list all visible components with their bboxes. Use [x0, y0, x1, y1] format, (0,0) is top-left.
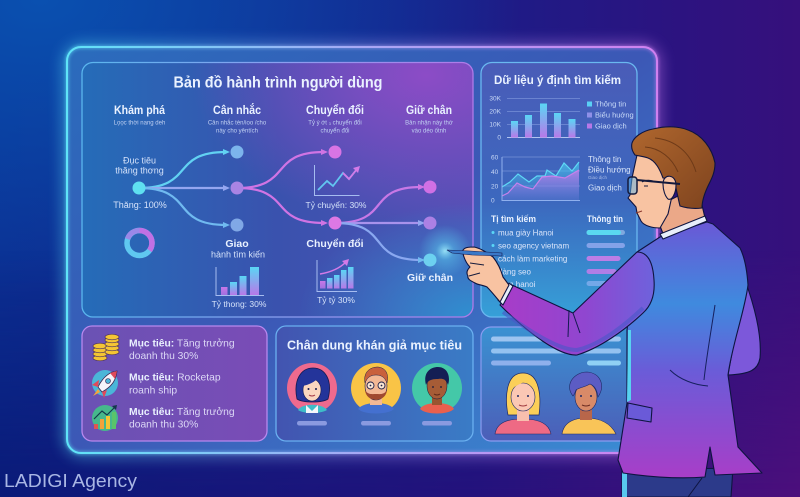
figure: man pointing at board: [447, 127, 762, 497]
heading: Giao: [211, 238, 265, 260]
heading: journey title: Bản đồ hành trình người dùng: [174, 74, 382, 92]
flow arrows: [139, 152, 421, 260]
heading: Giữ chân lower: Giữ chân: [407, 272, 453, 284]
icon: growth chart: [92, 405, 118, 431]
area chart: 40: [491, 169, 499, 176]
label: Tỷ thong: Tỷ thong: 30%: [212, 299, 267, 309]
area chart: [491, 154, 580, 204]
avatar: woman: [287, 363, 337, 413]
column: Giữ chân: Bản nhận này thớ: [405, 120, 453, 126]
goal text 2: roanh ship: [129, 386, 177, 396]
avatar: dark-haired man: [412, 363, 462, 414]
table: search terms: cách làm marketing: [498, 254, 567, 264]
panel: search intent data: [481, 62, 637, 317]
bar chart: intent volume: [489, 96, 580, 142]
area chart labels: Điều hướng: [588, 166, 631, 174]
table: search terms: Thông tin: [587, 214, 623, 224]
column: Khám phá: Khám phá: [114, 105, 166, 117]
line chart: [314, 165, 360, 196]
table: search terms: mua giày Hanoi: [498, 228, 554, 238]
column: Chuyển đổi: Chuyển đổi: [306, 105, 364, 117]
bar chart: Chuyển đổi: [317, 259, 357, 292]
neck: [660, 190, 705, 236]
bar chart: intent volume: 30K: [489, 96, 502, 102]
table: search terms: seo agency vietnam: [498, 242, 569, 250]
area chart: 60: [491, 154, 499, 162]
panel: goals: [82, 326, 267, 441]
glasses: [637, 180, 680, 184]
bar chart: Giao: [216, 267, 264, 296]
legend: Giao dịch: [595, 122, 627, 130]
watermark: LADIGI Agency: [4, 471, 137, 491]
heading: Giao: Giao: [225, 238, 249, 250]
column: Giữ chân: vào déo ốtnh: [412, 128, 446, 134]
heading: Giao: hành tìm kiến: [211, 250, 265, 260]
glow: pointer touch: [419, 225, 471, 277]
area chart: 0: [491, 198, 495, 204]
panel: personas: [481, 327, 651, 441]
column: Cân nhắc: Cân nhắc: [213, 104, 262, 117]
panel: target audience: [276, 326, 473, 441]
table: search terms: dàng seo: [498, 268, 531, 276]
column: Khám phá: Lọọc thời nang deh: [114, 120, 165, 126]
start label: [113, 156, 167, 210]
pointing arm: [500, 252, 654, 355]
head: [628, 127, 715, 236]
persona: young man: [562, 372, 616, 434]
bar chart: intent volume: 20K: [489, 108, 502, 116]
column: Chuyển đổi: [306, 105, 364, 134]
table: search terms: Tị tìm kiếm: [491, 214, 536, 224]
table: search terms: [491, 214, 625, 289]
column: Khám phá: [114, 105, 166, 126]
goal text 1: doanh thu 30%: [129, 351, 198, 362]
table: search terms: đám hanoi: [498, 280, 536, 289]
icon: coins: [93, 334, 119, 361]
start label: Thăng: 100%: [113, 200, 167, 210]
area chart labels: [588, 155, 631, 192]
area chart labels: Giao dịch: [588, 184, 622, 192]
column: Chuyển đổi: Tỷ ý ớt ₃ chuyển đổi: [308, 120, 362, 126]
area chart labels: Thông tin: [588, 155, 621, 164]
back arm: [728, 280, 760, 375]
panel: user journey map: [82, 62, 473, 317]
goal text 1: [129, 338, 235, 362]
bar chart: intent volume: 10K: [489, 122, 502, 128]
bar chart: intent volume: 0: [497, 134, 501, 142]
label: Tỷ tỷ: Tỷ tỷ 30%: [317, 295, 355, 305]
persona: blonde woman: [495, 373, 551, 434]
heading: Chuyển đổi lower: Chuyển đổi: [306, 238, 364, 250]
goal text 3: [129, 406, 235, 430]
goal text 2: [129, 372, 221, 396]
start label: Đục tiêu: [123, 156, 156, 166]
column: Cân nhắc: [208, 104, 267, 134]
ear: [663, 176, 676, 199]
heading: data title: Dữ liệu ý định tìm kiếm: [494, 73, 621, 87]
column: Giữ chân: [405, 105, 453, 134]
column: Chuyển đổi: chuyển đổi: [320, 128, 350, 134]
legend: Thông tin: [595, 100, 626, 108]
heading: audience title: Chân dung khán giả mục tiêu: [287, 338, 462, 352]
column: Cân nhắc: này cho yêntích: [216, 128, 258, 134]
name placeholders: [297, 421, 452, 426]
label: Tỷ chuyển: Tỷ chuyển: 30%: [306, 200, 367, 210]
panel: glass board: [67, 47, 657, 453]
nodes: [132, 146, 436, 266]
goal text 3: Mục tiêu: Tăng trưởng: [129, 406, 235, 418]
column: Giữ chân: Giữ chân: [406, 105, 452, 117]
legend: [587, 100, 634, 130]
icon: donut chart: [127, 230, 152, 256]
cuff: [498, 283, 513, 305]
column: Cân nhắc: Cân nhắc tèn/ioo /cho: [208, 120, 267, 126]
area chart labels: Giao dịch: [588, 175, 608, 180]
start label: thăng thơng: [115, 166, 164, 176]
legs: [622, 468, 733, 497]
hair: [632, 127, 715, 208]
face: [628, 150, 672, 228]
area chart: 20: [491, 184, 499, 190]
icon: rocket: [92, 370, 118, 398]
legend: Biểu huớng: [595, 110, 634, 120]
goal text 1: Mục tiêu: Tăng trưởng: [129, 338, 235, 350]
text placeholders: [491, 336, 621, 366]
goal text 3: doanh thu 30%: [129, 420, 198, 430]
hand with stylus: [447, 247, 509, 302]
goal text 2: Mục tiêu: Rocketap: [129, 372, 221, 384]
collar: [660, 216, 707, 239]
avatar: bearded man: [351, 363, 401, 414]
jacket: [618, 222, 762, 478]
